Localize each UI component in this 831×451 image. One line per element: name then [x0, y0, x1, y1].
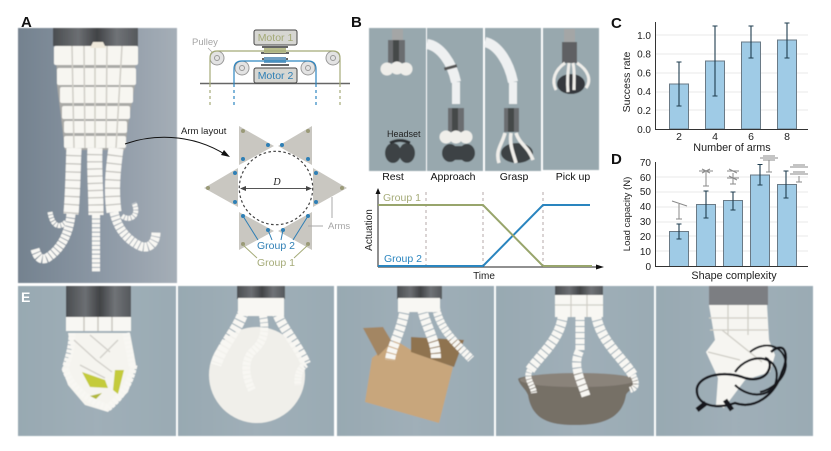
- chart: success rate: 0.0: [637, 125, 651, 136]
- photo E4: bowl: [496, 286, 654, 436]
- chart: success rate: 0.2: [637, 106, 651, 117]
- panel label B: B: [351, 14, 362, 31]
- motor 1: Motor 1: [258, 32, 293, 44]
- chart: success rate: 0.4: [637, 87, 651, 98]
- chart: actuation vs time: [364, 188, 604, 282]
- chart: success rate: 0.6: [637, 68, 651, 80]
- photo E3: cardboard box: [337, 286, 494, 436]
- chart: load capacity: 40: [640, 202, 651, 213]
- chart: success rate: 8: [784, 131, 790, 143]
- chart: load capacity: [622, 156, 808, 282]
- label: Group 1: Group 1: [383, 192, 421, 204]
- photo: Approach: [427, 28, 483, 171]
- chart: load capacity: 50: [640, 187, 651, 198]
- x axis title: Number of arms: [693, 142, 771, 154]
- chart: load capacity: 60: [640, 173, 651, 184]
- arrow: arm to layout: [125, 137, 226, 155]
- photo E1: tennis ball: [18, 286, 176, 436]
- shape icons: [672, 156, 808, 219]
- label: Headset: Headset: [387, 129, 421, 139]
- chart: load capacity: 0: [645, 262, 651, 273]
- diagram: arm layout: [204, 126, 347, 258]
- x axis title: Time: [473, 271, 495, 282]
- label: Group 1: Group 1: [257, 257, 295, 269]
- photo: Rest: [369, 28, 426, 171]
- motor 2: Motor 2: [258, 70, 293, 82]
- chart: success rate: 1.0: [637, 31, 651, 42]
- y axis title: Load capacity (N): [622, 177, 633, 251]
- photo: Pick up: [543, 28, 599, 170]
- captions: Grasp: Grasp: [500, 171, 528, 183]
- y axis title: Success rate: [621, 51, 633, 112]
- captions: Pick up: Pick up: [556, 171, 590, 183]
- chart: load capacity: 20: [640, 232, 651, 243]
- x axis title: Shape complexity: [691, 270, 777, 282]
- label: Group 2: Group 2: [384, 253, 422, 265]
- panel A: photo of octopus gripper: [18, 28, 177, 283]
- panel label D: D: [611, 151, 622, 168]
- label: Arm layout: Arm layout: [181, 126, 227, 137]
- chart: load capacity: 30: [640, 217, 651, 228]
- panel label C: C: [611, 15, 622, 32]
- motor 2: [254, 68, 297, 83]
- chart: success rate: 6: [748, 131, 754, 143]
- label: D: D: [272, 177, 281, 188]
- arrowhead: [221, 150, 230, 157]
- captions: Rest: Rest: [382, 171, 404, 183]
- y axis title: Actuation: [364, 209, 375, 251]
- chart: load capacity: 10: [640, 247, 651, 258]
- photo E2: large ball: [178, 286, 334, 436]
- diagram: motors and pulleys: [192, 30, 350, 106]
- chart: success rate: 2: [676, 131, 682, 143]
- chart: success rate: 4: [712, 131, 718, 143]
- panel label A: A: [21, 14, 32, 31]
- photo: Grasp: [485, 28, 541, 171]
- panel label E: E: [21, 289, 30, 305]
- label: Group 2: Group 2: [257, 240, 295, 252]
- captions: Approach: Approach: [431, 171, 476, 183]
- label: Pulley: Pulley: [192, 37, 218, 48]
- chart: success rate: [621, 22, 808, 154]
- chart: load capacity: 70: [640, 158, 651, 169]
- chart: success rate: 0.8: [637, 50, 651, 60]
- motor 1: [254, 30, 297, 45]
- label: Arms: Arms: [328, 221, 350, 232]
- photo E5: cable: [656, 286, 813, 436]
